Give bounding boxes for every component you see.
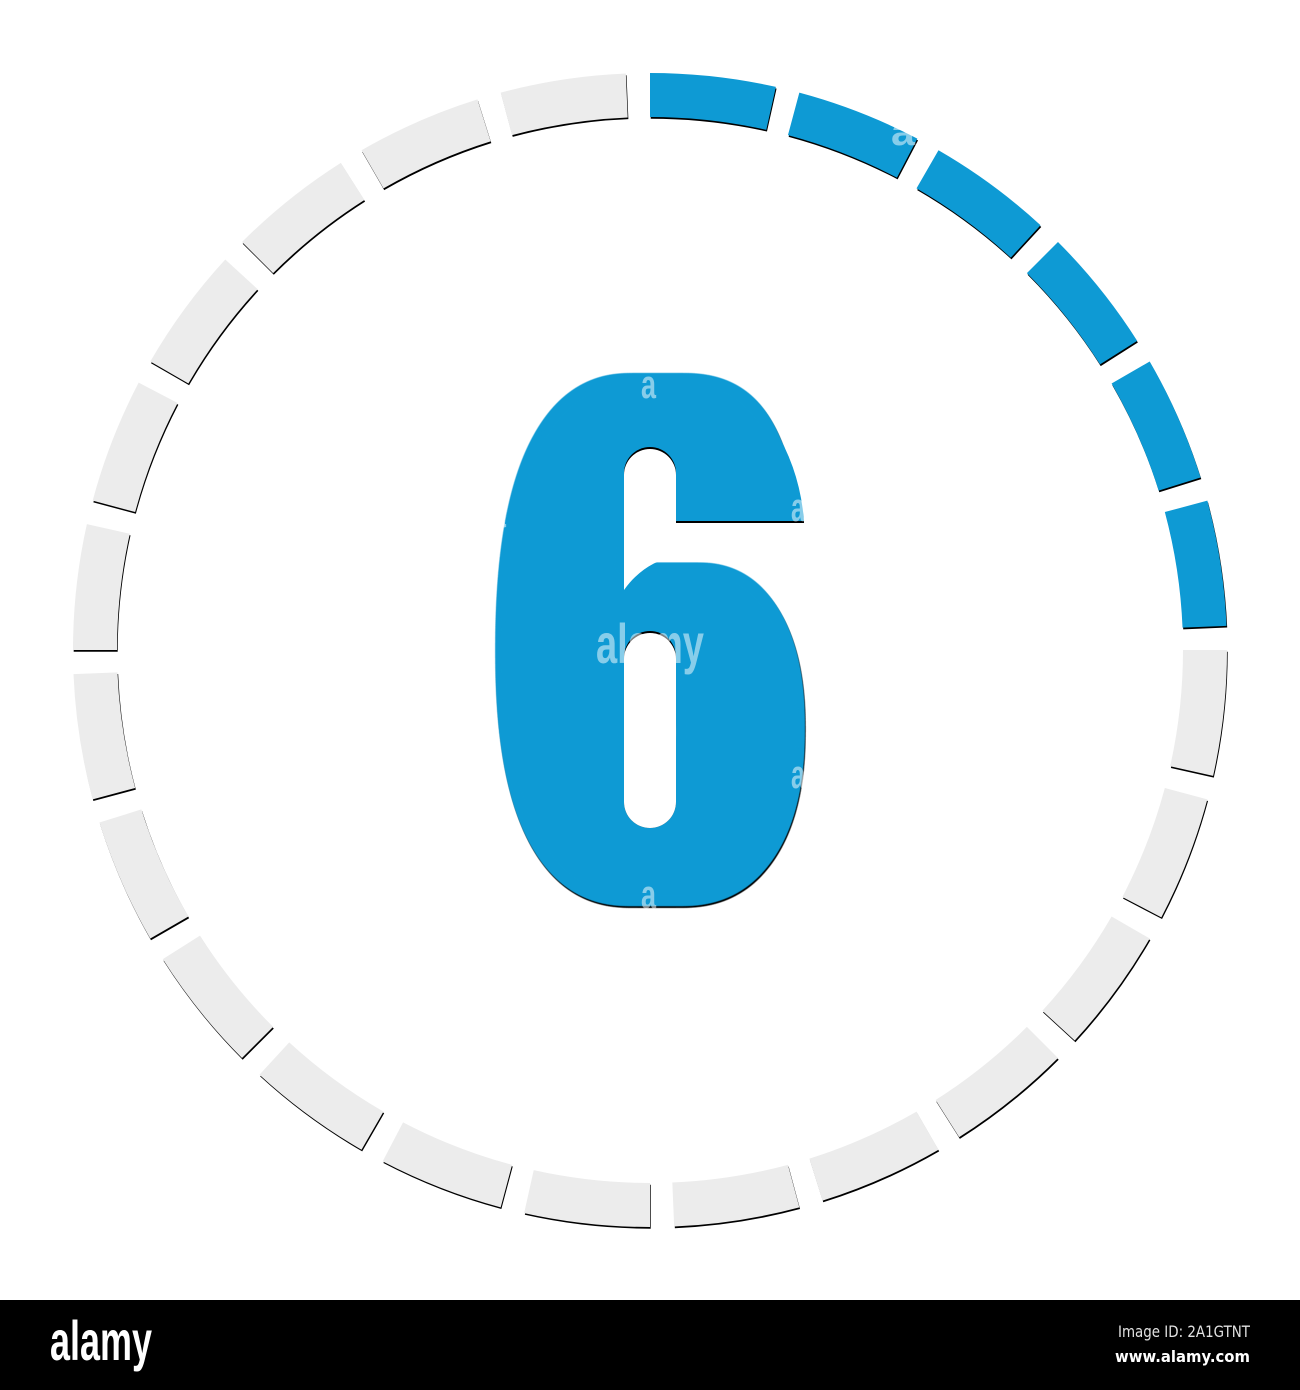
watermark: a <box>891 110 916 154</box>
watermark: alamy <box>596 612 704 675</box>
footer logo: alamy <box>50 1309 152 1372</box>
segmented progress ring <box>60 60 1241 1242</box>
watermark: a <box>641 873 657 917</box>
filled segments: blue 1 to 6 <box>650 73 1241 639</box>
central number 6: 6 <box>505 226 796 1055</box>
watermark: a <box>641 363 657 407</box>
footer bar <box>0 1300 1300 1390</box>
watermark: a <box>791 753 805 797</box>
empty segments: grey 7 to 24 <box>60 60 1228 1242</box>
watermark: a <box>791 486 805 530</box>
image id: Image ID: 2A1GTNT <box>1118 1322 1250 1341</box>
website: www.alamy.com <box>1115 1347 1250 1366</box>
watermark: a <box>495 753 506 797</box>
arm terminal of the 6 <box>676 428 804 521</box>
watermark <box>495 110 916 917</box>
counters of the 6 <box>624 447 816 828</box>
watermark: a <box>495 492 506 536</box>
central number 6: 6 <box>504 225 795 1053</box>
